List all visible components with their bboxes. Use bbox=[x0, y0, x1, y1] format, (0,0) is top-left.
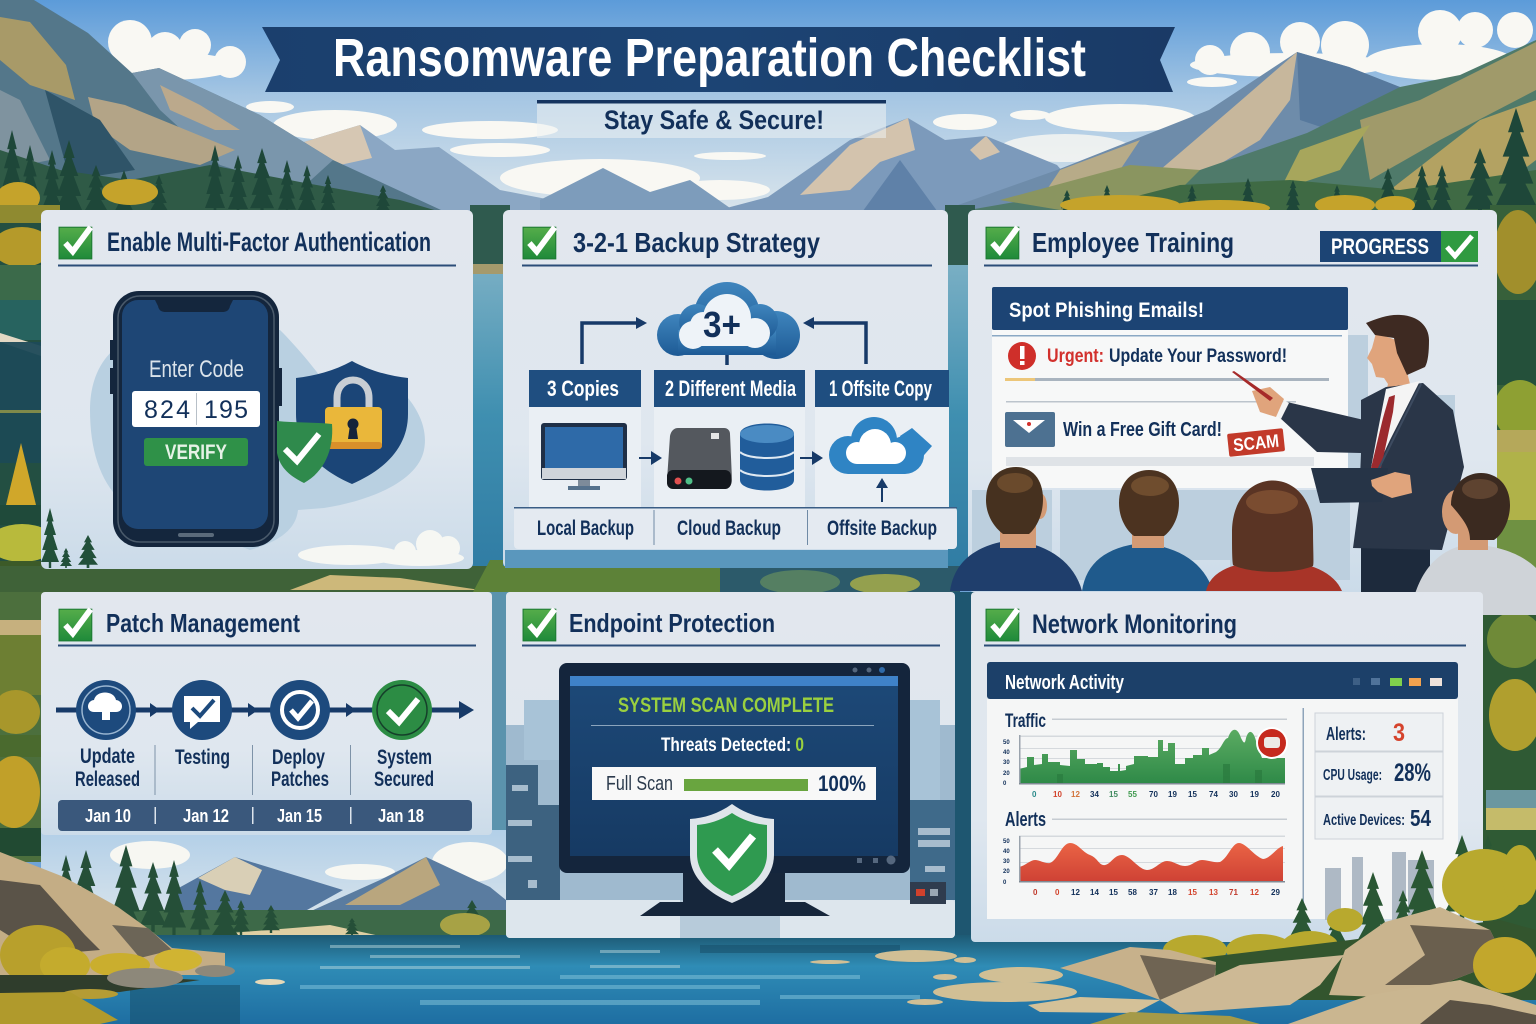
full scan bar: 100% bbox=[818, 771, 866, 796]
faint city skyline bbox=[1325, 852, 1434, 920]
stat: alerts: Alerts: bbox=[1326, 724, 1366, 744]
panel bottom water fade bbox=[505, 550, 948, 568]
background: water bbox=[0, 935, 1536, 1024]
lapel bbox=[1378, 384, 1421, 470]
urgent line bbox=[1047, 346, 1287, 367]
panel: enable multi-factor authentication bbox=[41, 210, 473, 569]
x axis ticks: 0 bbox=[1032, 790, 1037, 799]
background: distant mountains bbox=[304, 118, 1100, 215]
alert indicator bbox=[910, 882, 946, 904]
traffic chart: Traffic bbox=[1005, 711, 1046, 732]
flow arrows bbox=[639, 451, 823, 465]
cloud 3+: 3+ bbox=[703, 304, 741, 345]
x axis ticks: 0 bbox=[1033, 888, 1038, 897]
footer labels: Cloud Backup bbox=[677, 517, 781, 540]
date bar bbox=[58, 800, 472, 831]
column 1 offsite copy bbox=[815, 370, 949, 507]
background: right forest strip bbox=[1490, 205, 1536, 605]
scam badge: SCAM bbox=[1232, 431, 1280, 455]
scan heading: SYSTEM SCAN COMPLETE bbox=[618, 694, 834, 717]
column 2 different media bbox=[654, 370, 805, 507]
audience member 3 bbox=[1206, 480, 1342, 591]
background: shoals bbox=[810, 950, 1077, 1005]
heading: 3-2-1 Backup Strategy bbox=[573, 227, 820, 258]
background: forest under mountains bbox=[0, 108, 1536, 220]
footer labels bbox=[514, 507, 957, 549]
timeline bbox=[56, 680, 474, 740]
verify button: VERIFY bbox=[165, 441, 227, 464]
date bar: Jan 15 bbox=[277, 806, 322, 826]
audience member 1 bbox=[950, 467, 1082, 591]
background: left mountain bbox=[0, 0, 441, 215]
hair bbox=[1366, 315, 1429, 375]
icon: phone bbox=[110, 291, 282, 547]
x axis ticks: 19 bbox=[1168, 790, 1177, 799]
check icon bbox=[59, 227, 92, 259]
envelope icon bbox=[1005, 412, 1055, 447]
check icon bbox=[523, 227, 556, 259]
tablet hand bbox=[1371, 472, 1412, 498]
heading: Employee Training bbox=[1032, 227, 1234, 258]
x axis ticks: 13 bbox=[1209, 888, 1218, 897]
x axis ticks: 70 bbox=[1149, 790, 1158, 799]
dashboard title: Network Activity bbox=[1005, 672, 1125, 694]
x axis ticks: 0 bbox=[1055, 888, 1060, 897]
heading: Patch Management bbox=[106, 608, 300, 638]
background: right mountains bbox=[930, 40, 1536, 215]
y axis ticks: 50 bbox=[1003, 839, 1010, 845]
up arrow bbox=[876, 478, 888, 502]
step labels: Update bbox=[80, 745, 135, 768]
landscape corner clouds bbox=[298, 530, 464, 566]
date bar: Jan 10 bbox=[85, 806, 131, 826]
screen heading: Spot Phishing Emails! bbox=[1009, 299, 1204, 322]
x axis ticks: 34 bbox=[1090, 790, 1099, 799]
monitor stand bbox=[640, 870, 830, 916]
column 2 different media: 2 Different Media bbox=[665, 376, 797, 401]
x axis ticks: 71 bbox=[1229, 888, 1238, 897]
verify button bbox=[144, 438, 248, 466]
neck and face bbox=[1367, 333, 1412, 392]
stat: cpu usage: CPU Usage: bbox=[1323, 767, 1382, 784]
y axis ticks bbox=[1003, 839, 1010, 886]
phone text: Enter Code bbox=[149, 356, 244, 383]
icon: database bbox=[740, 424, 794, 490]
progress badge: PROGRESS bbox=[1331, 234, 1429, 259]
column 3 copies bbox=[529, 370, 641, 507]
shirt bbox=[1371, 381, 1420, 468]
x axis ticks: 12 bbox=[1250, 888, 1259, 897]
y axis ticks: 40 bbox=[1003, 849, 1010, 855]
background: clouds bbox=[93, 10, 1533, 200]
y axis ticks: 20 bbox=[1003, 869, 1010, 875]
audience member 4 bbox=[1410, 473, 1536, 615]
x axis ticks: 74 bbox=[1209, 790, 1218, 799]
icon: green shield bbox=[690, 804, 774, 903]
background: lower left valley bbox=[41, 830, 510, 955]
legs bbox=[1361, 548, 1430, 592]
icon: monitor bbox=[541, 423, 627, 490]
icon backdrop bbox=[90, 330, 425, 550]
jacket bbox=[1353, 383, 1464, 550]
progress badge bbox=[1320, 231, 1478, 262]
arm bbox=[1279, 402, 1364, 453]
x axis ticks: 19 bbox=[1250, 790, 1259, 799]
step: system secured icon bbox=[372, 680, 432, 740]
step labels bbox=[75, 745, 434, 795]
step labels: Patches bbox=[271, 768, 329, 791]
training screen bbox=[992, 287, 1348, 488]
urgent line: Urgent: bbox=[1047, 346, 1104, 367]
footer labels: Local Backup bbox=[537, 517, 634, 540]
step labels: Released bbox=[75, 768, 140, 791]
stat: alerts bbox=[1315, 713, 1443, 751]
x axis ticks: 15 bbox=[1109, 888, 1118, 897]
cuff bbox=[1276, 400, 1289, 419]
x axis ticks: 15 bbox=[1188, 888, 1197, 897]
y axis ticks: 50 bbox=[1003, 740, 1010, 746]
monitor bbox=[559, 663, 910, 873]
y axis ticks: 30 bbox=[1003, 859, 1010, 865]
x axis ticks: 30 bbox=[1229, 790, 1238, 799]
step labels: Secured bbox=[374, 768, 434, 791]
check icon bbox=[59, 609, 92, 641]
presenter bbox=[1232, 315, 1464, 592]
step labels: Deploy bbox=[272, 746, 325, 769]
subtitle: Stay Safe & Secure! bbox=[604, 105, 824, 135]
x axis ticks: 14 bbox=[1090, 888, 1099, 897]
y axis ticks: 30 bbox=[1003, 760, 1010, 766]
full scan bar bbox=[592, 767, 876, 800]
date bar: Jan 12 bbox=[183, 806, 229, 826]
footer labels: Offsite Backup bbox=[827, 517, 937, 540]
x axis ticks: 12 bbox=[1071, 790, 1080, 799]
column 1 offsite copy: 1 Offsite Copy bbox=[829, 376, 933, 401]
code field: 195 bbox=[204, 396, 248, 424]
tie bbox=[1371, 395, 1395, 468]
background: central lake gaps bbox=[470, 205, 975, 580]
background: left forest strip bbox=[0, 205, 60, 620]
code field: 824 bbox=[144, 396, 190, 424]
faint city backdrop bbox=[972, 335, 1455, 580]
x axis ticks: 15 bbox=[1188, 790, 1197, 799]
foreground trees bbox=[1288, 835, 1498, 955]
tablet bbox=[1311, 468, 1388, 503]
icon: shield with lock bbox=[296, 361, 408, 484]
x axis ticks: 20 bbox=[1271, 790, 1280, 799]
phishing line: Win a Free Gift Card! bbox=[1063, 419, 1222, 441]
y axis ticks: 40 bbox=[1003, 750, 1010, 756]
y axis ticks: 20 bbox=[1003, 771, 1010, 777]
heading: Endpoint Protection bbox=[569, 608, 775, 638]
stat: cpu usage bbox=[1315, 752, 1443, 796]
step: update released icon bbox=[76, 680, 136, 740]
y axis ticks: 0 bbox=[1003, 781, 1007, 787]
audience member 2 bbox=[1082, 470, 1213, 591]
foreground right rocks bbox=[1028, 907, 1536, 1024]
check icon bbox=[523, 609, 556, 641]
hand and pointer bbox=[1232, 371, 1284, 417]
panel: endpoint protection bbox=[506, 592, 955, 938]
arrows to cloud bbox=[582, 317, 866, 365]
code field bbox=[132, 391, 260, 427]
panel: employee training bbox=[950, 210, 1536, 615]
x axis ticks: 58 bbox=[1128, 888, 1137, 897]
background: left rocks and shrubs bbox=[0, 852, 285, 1024]
cloud 3+ bbox=[657, 282, 800, 359]
stat: alerts: 3 bbox=[1393, 719, 1405, 747]
stat: active devices bbox=[1315, 797, 1443, 839]
threats line: Threats Detected: 0 bbox=[661, 735, 804, 756]
step: testing icon bbox=[172, 680, 232, 740]
check icon bbox=[986, 609, 1019, 641]
column 3 copies: 3 Copies bbox=[547, 376, 619, 401]
y axis ticks: 0 bbox=[1003, 880, 1007, 886]
x axis ticks bbox=[1033, 888, 1280, 897]
alert icon bbox=[1008, 342, 1036, 370]
x axis ticks: 10 bbox=[1053, 790, 1062, 799]
subtitle bbox=[537, 100, 886, 138]
panel: 3-2-1 backup strategy bbox=[503, 210, 957, 568]
foreground yellow shrubs bbox=[1163, 845, 1536, 966]
panel: patch management bbox=[41, 592, 492, 835]
stat: cpu usage: 28% bbox=[1394, 759, 1431, 787]
status lights bbox=[1353, 678, 1442, 686]
step labels: System bbox=[377, 746, 432, 769]
x axis ticks: 29 bbox=[1271, 888, 1280, 897]
panel: network monitoring bbox=[971, 592, 1483, 942]
foreground dark undergrowth bbox=[1200, 920, 1536, 1000]
step labels: Testing bbox=[175, 746, 230, 769]
background: lower side strips bbox=[0, 592, 1536, 952]
heading: Network Monitoring bbox=[1032, 609, 1237, 639]
check icon bbox=[986, 227, 1019, 259]
traffic chart bbox=[1003, 711, 1288, 799]
dashboard bbox=[987, 662, 1458, 919]
x axis ticks: 18 bbox=[1168, 888, 1177, 897]
date bar: Jan 18 bbox=[378, 806, 424, 826]
alerts chart: Alerts bbox=[1005, 809, 1046, 831]
x axis ticks: 12 bbox=[1071, 888, 1080, 897]
urgent line: Update Your Password! bbox=[1109, 346, 1287, 367]
alarm dot bbox=[1256, 727, 1288, 759]
title banner: Ransomware Preparation Checklist bbox=[333, 28, 1086, 88]
x axis ticks: 55 bbox=[1128, 790, 1137, 799]
background: yellow foliage top bbox=[0, 179, 1415, 216]
landscape corner trees bbox=[41, 508, 98, 568]
x axis ticks bbox=[1032, 790, 1280, 799]
alerts chart bbox=[1003, 809, 1287, 897]
background: shoreline band bbox=[0, 560, 960, 596]
stat: active devices: Active Devices: bbox=[1323, 812, 1405, 829]
icon: green shield bbox=[277, 421, 332, 483]
faint city backdrop bbox=[506, 700, 955, 938]
step: deploy patches icon bbox=[270, 680, 330, 740]
x axis ticks: 37 bbox=[1149, 888, 1158, 897]
icon: cloud with arrow bbox=[829, 417, 932, 474]
full scan bar: Full Scan bbox=[606, 773, 673, 795]
stat: active devices: 54 bbox=[1410, 805, 1431, 831]
icon: hard drive bbox=[667, 428, 732, 489]
heading: Enable Multi-Factor Authentication bbox=[107, 227, 431, 257]
x axis ticks: 15 bbox=[1109, 790, 1118, 799]
y axis ticks bbox=[1003, 740, 1010, 787]
background: sky bbox=[0, 0, 1536, 240]
